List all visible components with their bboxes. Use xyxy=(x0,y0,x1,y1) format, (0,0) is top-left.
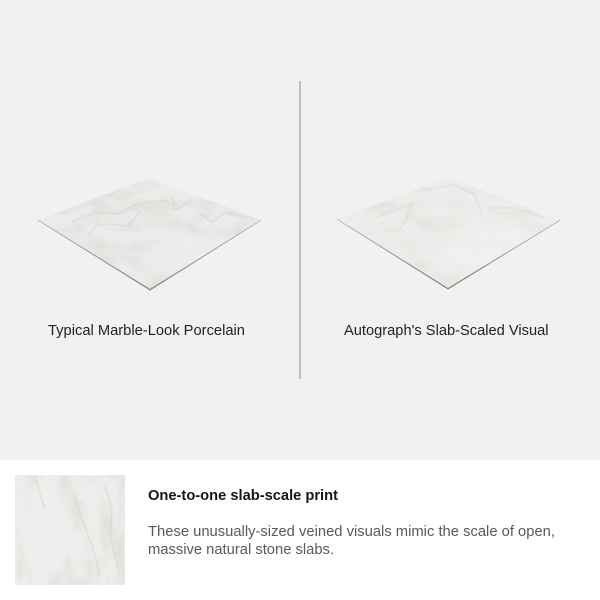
left marble slab: typical porcelain xyxy=(38,178,261,290)
bottom information panel background xyxy=(0,460,600,600)
marble swatch thumbnail xyxy=(15,475,125,585)
right marble slab: Autograph slab-scaled xyxy=(337,179,560,290)
top comparison panel background xyxy=(0,0,600,460)
information body text: massive natural stone slabs. xyxy=(148,542,334,558)
left caption: Typical Marble-Look Porcelain xyxy=(48,322,245,339)
information body text xyxy=(148,524,555,558)
right caption: Autograph's Slab-Scaled Visual xyxy=(344,322,548,339)
information heading: One-to-one slab-scale print xyxy=(148,488,338,504)
information body text: These unusually-sized veined visuals mimic the scale of open, xyxy=(148,524,555,540)
centre divider line xyxy=(300,81,301,379)
